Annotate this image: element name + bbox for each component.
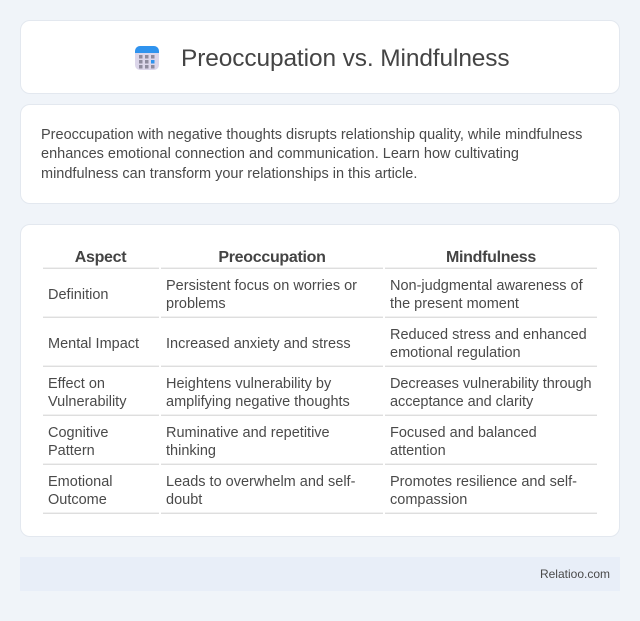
Cognitive Pattern: Preoccupation: thinking: [166, 443, 216, 459]
row: Emotional Outcome: Outcome: [48, 492, 107, 508]
Cognitive Pattern: Mindfulness: [390, 425, 537, 459]
Cognitive Pattern: Preoccupation: Ruminative and repetitive: [166, 425, 330, 441]
row: Effect on Vulnerability: Vulnerability: [48, 394, 126, 410]
Emotional Outcome: Preoccupation: doubt: [166, 492, 202, 508]
row: Effect on Vulnerability: Effect on: [48, 376, 105, 392]
Definition: Mindfulness: [390, 278, 583, 312]
intro text: [41, 126, 582, 182]
row: Mental Impact: Mental Impact: [48, 336, 139, 352]
row: Cognitive Pattern: Pattern: [48, 443, 95, 459]
panel: comparison table: [20, 224, 620, 537]
row: Cognitive Pattern: [48, 425, 108, 459]
Effect on Vulnerability: Mindfulness: acceptance and clarity: [390, 394, 533, 410]
Effect on Vulnerability: Mindfulness: [390, 376, 592, 410]
Definition: Preoccupation: Persistent focus on worries or: [166, 278, 357, 294]
intro text: mindfulness can transform your relationships in this article.: [41, 166, 417, 182]
Definition: Mindfulness: the present moment: [390, 296, 519, 312]
table header: Mindfulness: Mindfulness: [446, 249, 536, 266]
Effect on Vulnerability: Mindfulness: Decreases vulnerability through: [390, 376, 592, 392]
Mental Impact: Mindfulness: emotional regulation: [390, 345, 521, 361]
Cognitive Pattern: Mindfulness: Focused and balanced: [390, 425, 537, 441]
Mental Impact: Mindfulness: [390, 327, 587, 361]
Emotional Outcome: Mindfulness: compassion: [390, 492, 467, 508]
Definition: Mindfulness: Non-judgmental awareness of: [390, 278, 583, 294]
Cognitive Pattern: Preoccupation: [166, 425, 330, 459]
intro text: Preoccupation with negative thoughts disrupts relationship quality, while mindfulness: [41, 126, 582, 142]
footer text: Relatioo.com: [540, 567, 610, 581]
Emotional Outcome: Preoccupation: Leads to overwhelm and self-: [166, 474, 355, 490]
row: Cognitive Pattern: Cognitive: [48, 425, 108, 441]
table header: Aspect: Aspect: [75, 249, 126, 266]
Cognitive Pattern: Mindfulness: attention: [390, 443, 446, 459]
Emotional Outcome: Preoccupation: [166, 474, 355, 508]
Mental Impact: Preoccupation: Increased anxiety and stress: [166, 336, 351, 352]
icon: calendar: [135, 46, 159, 70]
row: Definition: Definition: [48, 287, 108, 303]
Definition: Preoccupation: problems: [166, 296, 226, 312]
Emotional Outcome: Mindfulness: [390, 474, 577, 508]
Mental Impact: Mindfulness: Reduced stress and enhanced: [390, 327, 587, 343]
Effect on Vulnerability: Preoccupation: Heightens vulnerability by: [166, 376, 331, 392]
Effect on Vulnerability: Preoccupation: [166, 376, 350, 410]
table header: Preoccupation: Preoccupation: [218, 249, 326, 266]
Emotional Outcome: Mindfulness: Promotes resilience and self-: [390, 474, 577, 490]
row: Emotional Outcome: Emotional: [48, 474, 112, 490]
Effect on Vulnerability: Preoccupation: amplifying negative thoughts: [166, 394, 350, 410]
intro text: enhances emotional connection and communication. Learn how cultivating: [41, 146, 519, 162]
row: Effect on Vulnerability: [48, 376, 126, 410]
row: Emotional Outcome: [48, 474, 112, 508]
title card: [20, 20, 620, 94]
Definition: Preoccupation: [166, 278, 357, 312]
title: Preoccupation vs. Mindfulness: [181, 45, 510, 72]
intro panel: [20, 104, 620, 204]
footer bar: [20, 557, 620, 591]
